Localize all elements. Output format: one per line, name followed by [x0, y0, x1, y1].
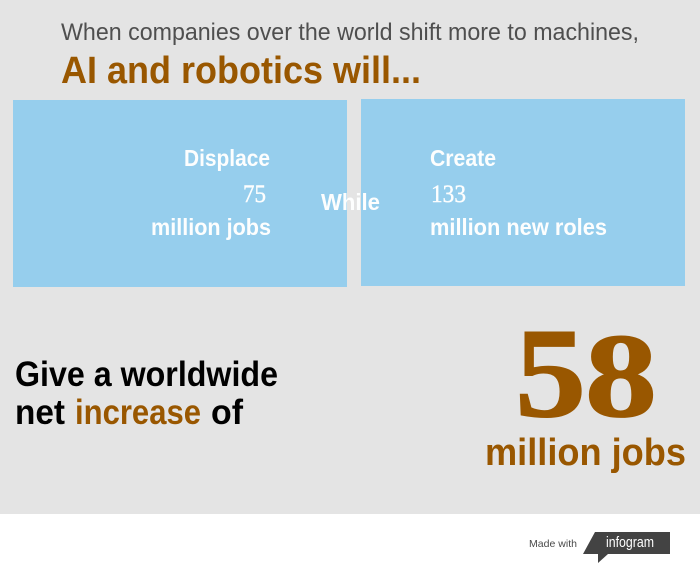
statement line two: net [15, 393, 65, 432]
displace label: Displace [184, 145, 270, 171]
made with label: Made with [529, 538, 577, 550]
heading: AI and robotics will... [61, 50, 421, 92]
infogram logo [583, 532, 670, 563]
create number: 133 [431, 181, 466, 208]
intro text: When companies over the world shift more to machines, [61, 19, 639, 46]
logo wordmark: infogram [606, 534, 654, 551]
statement line one: Give a worldwide [15, 355, 278, 394]
statement line two: increase [75, 393, 201, 432]
big number unit: million jobs [485, 432, 686, 474]
connector word: While [321, 189, 380, 215]
net increase statement [15, 355, 278, 432]
statement line two: of [211, 393, 243, 432]
create label: Create [430, 145, 496, 171]
displace background [13, 100, 347, 287]
panel: displace [13, 100, 347, 287]
footer credit [529, 532, 670, 563]
logo speech tag [583, 532, 670, 563]
big number: 5 [515, 302, 586, 444]
displace unit: million jobs [151, 214, 271, 240]
big number: 8 [585, 309, 657, 442]
displace number: 75 [243, 181, 266, 208]
create unit: million new roles [430, 214, 607, 240]
create background [361, 99, 685, 286]
panel: create [361, 99, 685, 286]
